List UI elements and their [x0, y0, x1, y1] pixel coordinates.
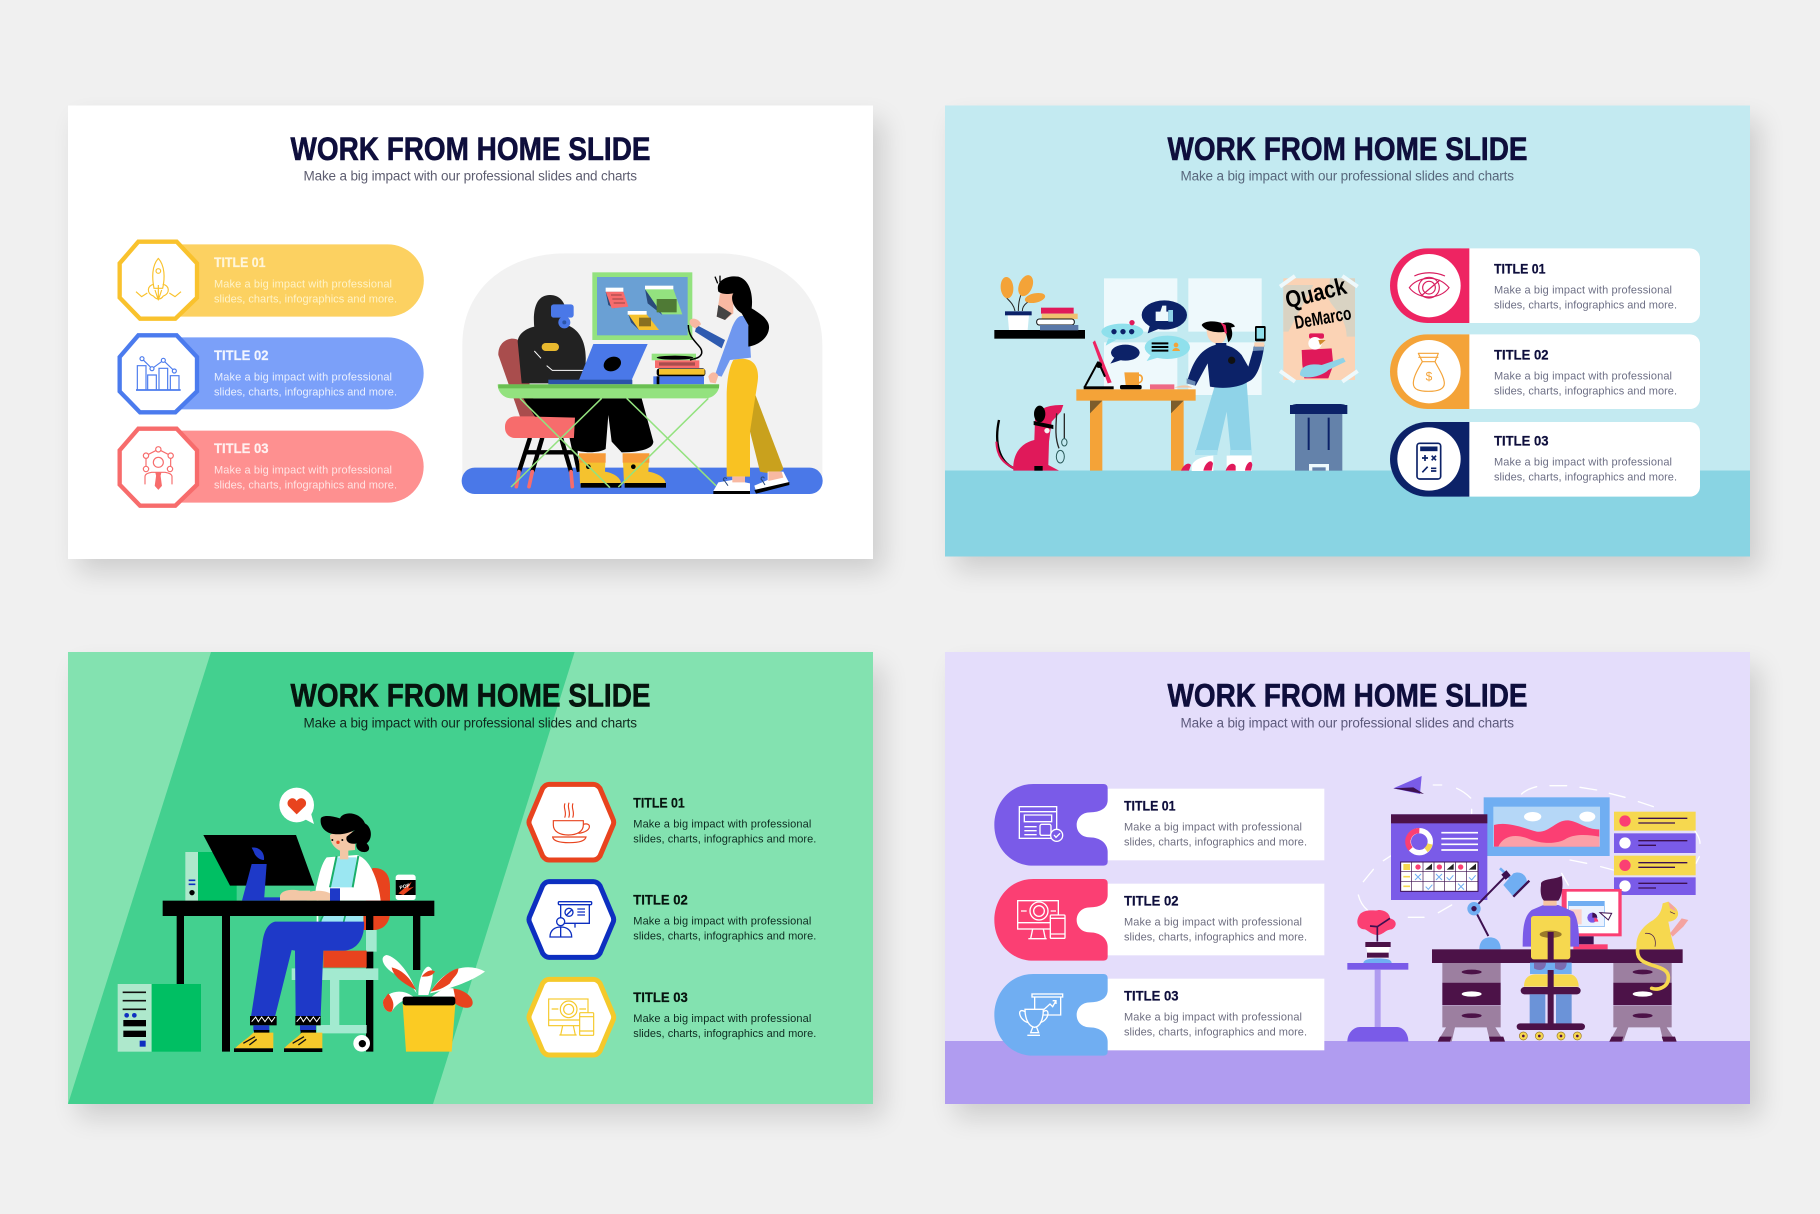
- title: WORK FROM HOME SLIDE: [290, 131, 650, 167]
- illustration: person with phone, dog and poster: [994, 273, 1358, 471]
- icon: calculator: [1417, 443, 1441, 479]
- icon: money bag: [1413, 353, 1444, 391]
- list text: Make a big impact with professional: [633, 916, 811, 928]
- list text: Make a big impact with professional: [1494, 370, 1672, 382]
- icon: trophy and chart: [1020, 994, 1063, 1035]
- list text: TITLE 03: [1124, 988, 1179, 1004]
- list text: TITLE 03: [1494, 432, 1549, 448]
- icon: eye: [1409, 273, 1449, 298]
- panel: white slide: [68, 106, 1750, 1104]
- list text: TITLE 01: [633, 794, 685, 810]
- list text: [214, 254, 397, 491]
- illustration: person at computer: [118, 788, 485, 1052]
- subtitle: Make a big impact with our professional slides and charts: [304, 168, 637, 184]
- icon: money bag: $: [1426, 370, 1433, 384]
- list text: Make a big impact with professional: [214, 371, 392, 383]
- list text: Make a big impact with professional: [214, 278, 392, 290]
- illustration: two coworkers at desk: [462, 253, 823, 494]
- icon: rocket: [136, 258, 181, 300]
- list text: slides, charts, infographics and more.: [214, 293, 397, 305]
- title: WORK FROM HOME SLIDE: [290, 678, 650, 714]
- list text: [633, 794, 816, 1040]
- list: notched cards: [994, 784, 1324, 1056]
- panel: green slide: [68, 652, 873, 1104]
- title: WORK FROM HOME SLIDE: [1168, 678, 1528, 714]
- list text: TITLE 01: [1494, 260, 1546, 276]
- panel: blue slide: [945, 106, 1750, 556]
- list: three pills: [120, 242, 823, 506]
- list text: Make a big impact with professional: [1124, 1011, 1302, 1023]
- subtitle: Make a big impact with our professional slides and charts: [1180, 715, 1514, 730]
- icon: bar chart: [136, 357, 181, 390]
- list text: slides, charts, infographics and more.: [1494, 385, 1677, 397]
- list text: slides, charts, infographics and more.: [1494, 471, 1677, 483]
- list text: TITLE 02: [1494, 346, 1549, 362]
- list text: Make a big impact with professional: [1124, 916, 1302, 928]
- list text: TITLE 03: [633, 989, 688, 1005]
- list text: slides, charts, infographics and more.: [1494, 299, 1677, 311]
- illustration: person at desk with dashboards and cat: [1347, 776, 1700, 1042]
- illustration: person at computer: POP: [399, 883, 411, 891]
- list text: TITLE 01: [1124, 798, 1176, 814]
- list text: TITLE 02: [1124, 893, 1179, 909]
- list text: slides, charts, infographics and more.: [214, 479, 397, 491]
- icon: coffee cup: [553, 803, 589, 843]
- list cards: [1390, 248, 1700, 497]
- list text: slides, charts, infographics and more.: [633, 833, 816, 845]
- list text: slides, charts, infographics and more.: [1124, 836, 1307, 848]
- list text: TITLE 02: [633, 892, 688, 908]
- icon: monitor and phone: [549, 999, 594, 1035]
- list text: TITLE 02: [214, 347, 269, 363]
- icon: network: [143, 447, 173, 489]
- list text: Make a big impact with professional: [633, 818, 811, 830]
- list text: Make a big impact with professional: [633, 1013, 811, 1025]
- panel: purple slide: [945, 652, 1750, 1104]
- subtitle: Make a big impact with our professional slides and charts: [1180, 168, 1514, 184]
- list text: slides, charts, infographics and more.: [633, 931, 816, 943]
- list text: TITLE 01: [214, 254, 266, 270]
- list text: Make a big impact with professional: [214, 464, 392, 476]
- list: hexagons: [529, 784, 614, 1055]
- list text: TITLE 03: [214, 440, 269, 456]
- list text: Make a big impact with professional: [1494, 456, 1672, 468]
- icon: browser window: [1019, 807, 1063, 841]
- icon: monitor and phone: [1018, 901, 1065, 939]
- subtitle: Make a big impact with our professional slides and charts: [304, 715, 637, 730]
- list text: [1124, 798, 1307, 1038]
- icon: presentation: [550, 902, 592, 937]
- title: WORK FROM HOME SLIDE: [1168, 131, 1528, 167]
- illustration: person with phone, dog and poster: DeMarco: [1293, 302, 1353, 333]
- list text: Make a big impact with professional: [1124, 821, 1302, 833]
- list text: slides, charts, infographics and more.: [1124, 1026, 1307, 1038]
- illustration: person with phone, dog and poster: Quack: [1283, 273, 1350, 314]
- list text: slides, charts, infographics and more.: [214, 386, 397, 398]
- list text: Make a big impact with professional: [1494, 284, 1672, 296]
- list text: [1494, 260, 1677, 483]
- list text: slides, charts, infographics and more.: [633, 1028, 816, 1040]
- list text: slides, charts, infographics and more.: [1124, 931, 1307, 943]
